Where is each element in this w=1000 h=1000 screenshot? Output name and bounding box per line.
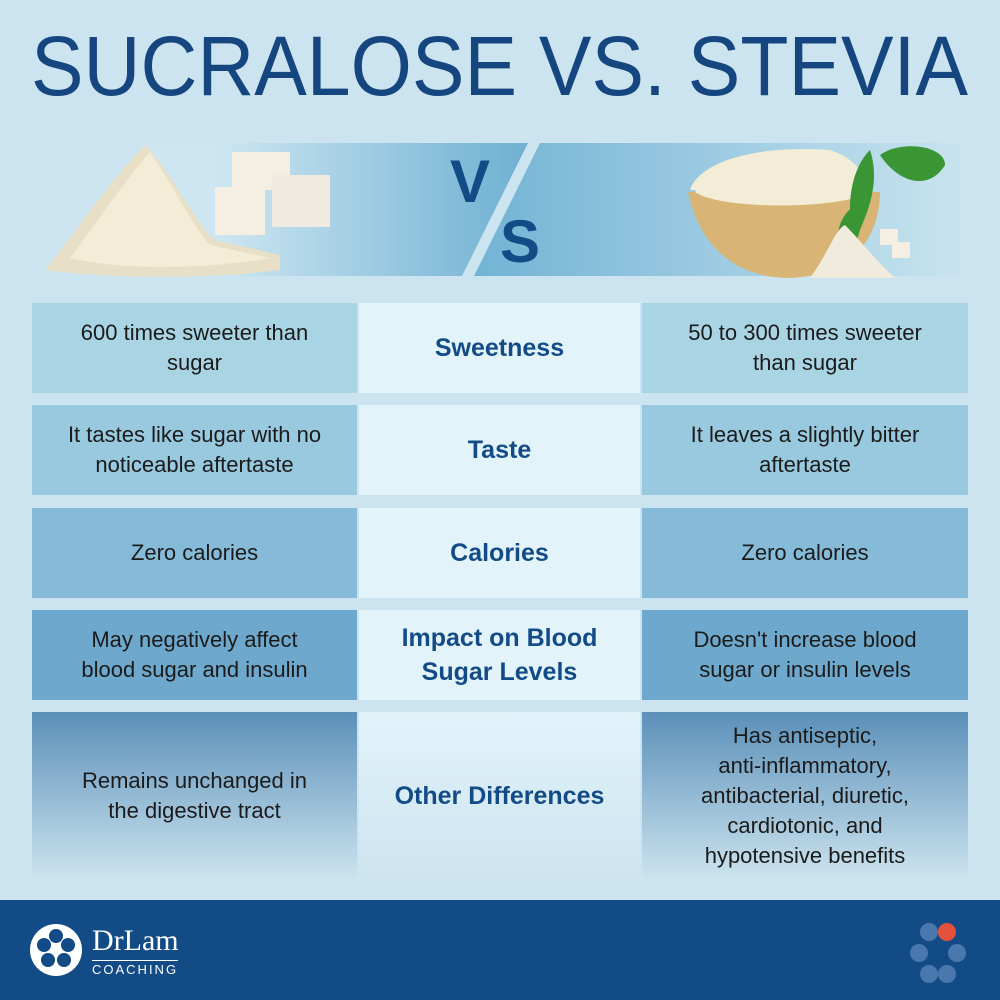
row: taste bbox=[32, 405, 968, 495]
sucralose other bbox=[32, 712, 357, 880]
sucralose calories bbox=[32, 508, 357, 598]
sucralose sweetness: sugar bbox=[167, 350, 222, 375]
stevia other: antibacterial, diuretic, bbox=[701, 783, 909, 808]
stevia calories bbox=[642, 508, 968, 598]
stevia taste: aftertaste bbox=[759, 452, 851, 477]
stevia taste: It leaves a slightly bitter bbox=[691, 422, 919, 447]
label taste: Taste bbox=[468, 436, 531, 464]
title: SUCRALOSE VS. STEVIA bbox=[31, 19, 968, 113]
footer bbox=[0, 900, 1000, 1000]
row: other differences bbox=[32, 712, 968, 868]
sucralose taste: It tastes like sugar with no bbox=[68, 422, 321, 447]
stevia other: cardiotonic, and bbox=[727, 813, 883, 838]
icon: VS letters: V bbox=[450, 148, 490, 215]
label other bbox=[359, 712, 640, 880]
banner: vs illustration bbox=[45, 143, 945, 278]
stevia other bbox=[642, 712, 968, 880]
stevia sweetness bbox=[642, 303, 968, 393]
logo: DrLam Coaching: COACHING bbox=[92, 962, 178, 977]
row: calories bbox=[32, 508, 968, 598]
logo: DrLam Coaching bbox=[30, 924, 179, 977]
stevia taste bbox=[642, 405, 968, 495]
stevia sweetness: than sugar bbox=[753, 350, 857, 375]
stevia blood sugar bbox=[642, 610, 968, 700]
row: sweetness bbox=[32, 303, 968, 393]
sucralose taste: noticeable aftertaste bbox=[95, 452, 294, 477]
icon: VS letters: S bbox=[500, 208, 540, 275]
sucralose other: the digestive tract bbox=[108, 798, 281, 823]
label calories: Calories bbox=[450, 539, 549, 567]
label sweetness: Sweetness bbox=[435, 334, 564, 362]
sucralose blood sugar bbox=[32, 610, 357, 700]
sucralose taste bbox=[32, 405, 357, 495]
stevia other: hypotensive benefits bbox=[705, 843, 905, 868]
stevia blood sugar: sugar or insulin levels bbox=[699, 657, 911, 682]
row: blood sugar bbox=[32, 610, 968, 700]
label sweetness bbox=[359, 303, 640, 393]
label taste bbox=[359, 405, 640, 495]
sucralose blood sugar: blood sugar and insulin bbox=[81, 657, 308, 682]
label calories bbox=[359, 508, 640, 598]
stevia other: anti-inflammatory, bbox=[718, 753, 892, 778]
sucralose sweetness bbox=[32, 303, 357, 393]
icon: flower mark bbox=[910, 923, 966, 983]
label other: Other Differences bbox=[395, 782, 604, 810]
sucralose sweetness: 600 times sweeter than bbox=[81, 320, 308, 345]
sucralose calories: Zero calories bbox=[131, 540, 258, 565]
stevia calories: Zero calories bbox=[741, 540, 869, 565]
logo: DrLam Coaching: DrLam bbox=[92, 924, 179, 957]
label blood sugar: Sugar Levels bbox=[422, 658, 577, 686]
stevia other: Has antiseptic, bbox=[733, 723, 877, 748]
stevia blood sugar: Doesn't increase blood bbox=[693, 627, 917, 652]
icon: sugar pile and cubes bbox=[45, 145, 330, 277]
label blood sugar bbox=[359, 610, 640, 700]
label blood sugar: Impact on Blood bbox=[402, 624, 597, 652]
sucralose blood sugar: May negatively affect bbox=[91, 627, 298, 652]
icon: stevia bowl with leaves bbox=[688, 146, 945, 278]
icon: VS letters bbox=[450, 148, 540, 275]
stevia sweetness: 50 to 300 times sweeter bbox=[688, 320, 922, 345]
sucralose other: Remains unchanged in bbox=[82, 768, 307, 793]
